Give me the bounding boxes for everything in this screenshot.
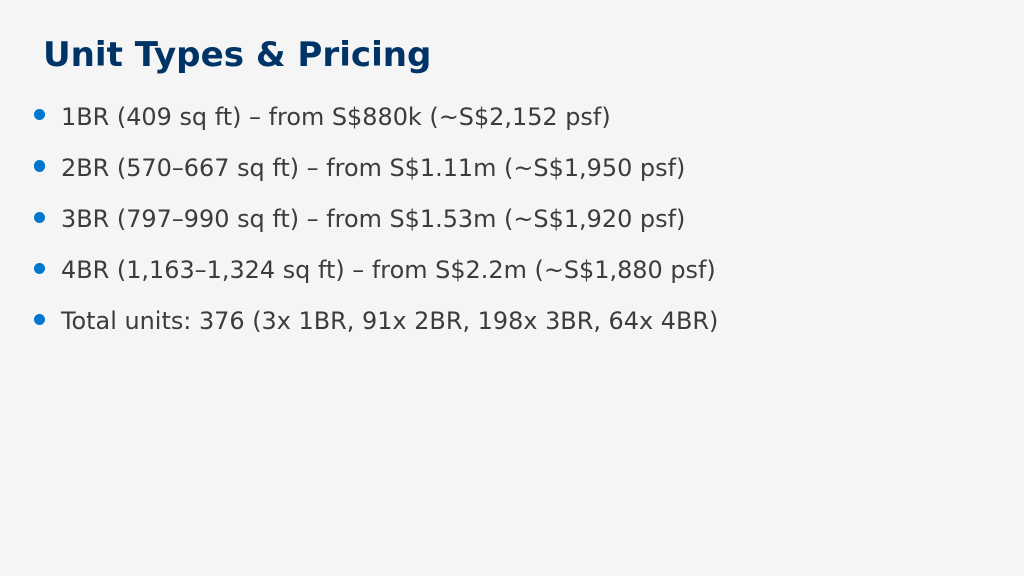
bullet: 2BR: 2BR (570–667 sq ft) – from S$1.11m (~S$1,950 psf) bbox=[61, 154, 685, 182]
title: Unit Types & Pricing bbox=[43, 35, 431, 75]
bullet: 4BR: 4BR (1,163–1,324 sq ft) – from S$2.2m (~S$1,880 psf) bbox=[61, 256, 716, 284]
bullet: 1BR: 1BR (409 sq ft) – from S$880k (~S$2,152 psf) bbox=[61, 103, 611, 131]
bullet: total units: Total units: 376 (3x 1BR, 91x 2BR, 198x 3BR, 64x 4BR) bbox=[61, 307, 718, 335]
bullet: 3BR: 3BR (797–990 sq ft) – from S$1.53m (~S$1,920 psf) bbox=[61, 205, 685, 233]
